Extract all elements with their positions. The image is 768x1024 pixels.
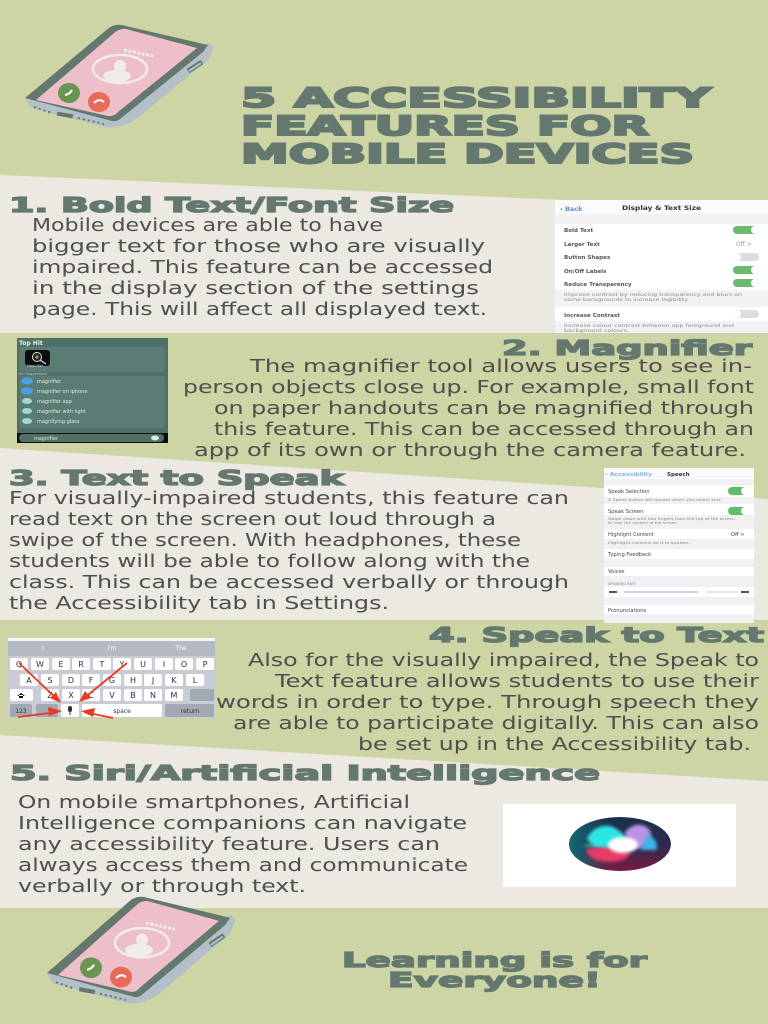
heading: speak to text: 4. Speak to Text: [429, 623, 765, 647]
heading: bold text: 1. Bold Text/Font Size: [9, 193, 454, 217]
screenshot: speech settings: Speak Screen: [608, 509, 643, 515]
screenshot: keyboard with arrows: A: [26, 676, 32, 685]
icon: phone bottom: [47, 897, 236, 1003]
text block: siri: [18, 793, 468, 897]
screenshot: keyboard with arrows: C: [88, 691, 94, 700]
text block: bold text: bigger text for those who are visually: [32, 237, 485, 257]
screenshot: keyboard with arrows: P: [203, 660, 208, 669]
screenshot: keyboard with arrows: E: [58, 660, 64, 669]
screenshot: keyboard with arrows: L: [193, 676, 198, 685]
screenshot: keyboard with arrows: Q: [16, 660, 22, 669]
text block: text to speak: swipe of the screen. With headphones, these: [9, 531, 521, 551]
screenshot: speech settings: Typing Feedback: [607, 552, 651, 558]
screenshot: display and text size settings: ‹ Back: [560, 205, 583, 213]
screenshot: display and text size settings: Increase Contrast: [564, 313, 620, 319]
screenshot: keyboard with arrows: D: [68, 676, 74, 685]
title: MOBILE DEVICES: [241, 139, 694, 170]
text block: magnifier: this feature. This can be accessed through an: [214, 420, 754, 440]
screenshot: keyboard with arrows: X: [68, 691, 74, 700]
closing message: [342, 948, 647, 992]
screenshot: keyboard with arrows: J: [151, 676, 154, 685]
text block: speak to text: are able to participate digitally. This can also: [233, 714, 759, 734]
text block: bold text: in the display section of the settings: [32, 279, 479, 299]
panel: siri background: [0, 735, 768, 908]
screenshot: magnifier search: magnifying glass: [37, 419, 80, 425]
screenshot: speech settings: A Speak button will appear when you select text.: [608, 498, 722, 502]
screenshot: speech settings: Speech: [667, 472, 690, 478]
screenshot: keyboard with arrows: H: [130, 676, 136, 685]
text block: magnifier: The magnifier tool allows users to see in-: [249, 357, 752, 377]
screenshot: display and text size settings: background colours.: [564, 328, 629, 333]
panel: text to speak background: [0, 448, 768, 620]
text block: magnifier: on paper handouts can be magnified through: [214, 399, 754, 419]
screenshot: speech settings: Highlight Content: [608, 532, 654, 538]
text block: siri: any accessibility feature. Users can: [18, 835, 440, 855]
icon: phone top: [25, 25, 214, 127]
screenshot: magnifier search: magnifier on iphone: [37, 389, 87, 395]
screenshot: keyboard with arrows: O: [181, 660, 187, 669]
text block: text to speak: read text on the screen out loud through a: [9, 510, 496, 530]
screenshot: keyboard with arrows: I'm: [107, 645, 117, 652]
title: 5 ACCESSIBILITY: [241, 83, 712, 114]
text block: bold text: impaired. This feature can be accessed: [32, 258, 493, 278]
screenshot: keyboard with arrows: V: [109, 691, 115, 700]
screenshot: display and text size settings: Bold Text: [564, 228, 593, 234]
text block: speak to text: be set up in the Accessibility tab.: [358, 735, 751, 755]
screenshot: display and text size settings: Off >: [736, 241, 752, 248]
screenshot: speech settings: Swipe down with two fingers from the top of the screen: [608, 517, 735, 521]
screenshot: display and text size settings: [555, 200, 768, 333]
screenshot: keyboard with arrows: R: [78, 660, 84, 669]
screenshot: keyboard with arrows: space: [113, 708, 131, 715]
screenshot: keyboard with arrows: [8, 638, 215, 718]
text block: siri: verbally or through text.: [18, 877, 306, 897]
screenshot: magnifier search: Top Hit: [19, 340, 43, 347]
screenshot: keyboard with arrows: W: [36, 660, 44, 669]
screenshot: magnifier search: Siri Suggestions: [19, 372, 47, 376]
text block: speak to text: words in order to type. Through speech they: [216, 693, 759, 713]
screenshot: display and text size settings: Increase colour contrast between app foreground and: [564, 323, 735, 328]
screenshot: display and text size settings: some backgrounds to increase legibility.: [564, 297, 689, 302]
screenshot: magnifier search: magnifier app: [37, 399, 72, 405]
screenshot: speech settings: SPEAKING RATE: [608, 582, 637, 586]
text block: siri: always access them and communicate: [18, 856, 468, 876]
text block: magnifier: [183, 357, 754, 461]
screenshot: display and text size settings: Button Shapes: [564, 255, 611, 261]
screenshot: speech settings: to hear the content of the screen.: [608, 521, 678, 525]
screenshot: keyboard with arrows: return: [181, 708, 199, 715]
screenshot: magnifier search: Magnifier: [27, 364, 44, 368]
arrows: pointing to microphone key: [18, 663, 127, 718]
text block: bold text: [32, 216, 493, 320]
screenshot: magnifier search: magnifier with light: [37, 409, 86, 415]
screenshot: keyboard with arrows: B: [130, 691, 136, 700]
screenshot: speech settings: Off >: [731, 532, 745, 538]
text block: siri: On mobile smartphones, Artificial: [18, 793, 410, 813]
panel: bold text background: [0, 175, 768, 333]
screenshot: keyboard with arrows: Z: [47, 691, 53, 700]
icon: siri orb: [503, 804, 736, 887]
text block: text to speak: students will be able to follow along with the: [9, 552, 530, 572]
text block: text to speak: the Accessibility tab in Settings.: [9, 594, 389, 614]
screenshot: speech settings: Voices: [608, 569, 625, 575]
text block: siri: Intelligence companions can navigate: [18, 814, 467, 834]
screenshot: magnifier search: [17, 338, 168, 443]
screenshot: keyboard with arrows: K: [171, 676, 177, 685]
screenshot: keyboard with arrows: U: [140, 660, 146, 669]
screenshot: keyboard with arrows: Y: [119, 660, 125, 669]
screenshot: speech settings: Highlight content as it is spoken.: [608, 541, 690, 545]
screenshot: keyboard with arrows: N: [150, 691, 156, 700]
screenshot: keyboard with arrows: F: [89, 676, 94, 685]
text block: speak to text: [216, 651, 760, 755]
text block: magnifier: app of its own or through the camera feature.: [194, 441, 746, 461]
screenshot: keyboard with arrows: M: [171, 691, 178, 700]
screenshot: keyboard with arrows: The: [174, 645, 187, 652]
text block: speak to text: Also for the visually impaired, the Speak to: [248, 651, 759, 671]
screenshot: display and text size settings: Reduce Transparency: [564, 282, 632, 288]
title: FEATURES FOR: [241, 111, 649, 142]
screenshot: keyboard with arrows: G: [109, 676, 115, 685]
text block: magnifier: person objects close up. For example, small font: [183, 378, 754, 398]
screenshot: magnifier search: magnifier: [34, 436, 59, 442]
heading: siri: 5. Siri/Artificial Intelligence: [10, 761, 600, 785]
screenshot: speech settings: [604, 468, 754, 623]
text block: speak to text: Text feature allows students to use their: [274, 672, 760, 692]
screenshot: display and text size settings: Improve contrast by reducing transparency and blurs on: [564, 292, 743, 297]
closing message: Everyone!: [388, 968, 601, 992]
screenshot: keyboard with arrows: T: [99, 660, 105, 669]
text block: bold text: Mobile devices are able to have: [32, 216, 383, 236]
screenshot: speech settings: Speak Selection: [608, 489, 650, 495]
screenshot: keyboard with arrows: S: [47, 676, 53, 685]
heading: magnifier: 2. Magnifier: [502, 336, 752, 360]
screenshot: display and text size settings: Display & Text Size: [622, 205, 701, 212]
text block: text to speak: class. This can be accessed verbally or through: [9, 573, 569, 593]
closing message: Learning is for: [342, 948, 647, 972]
screenshot: keyboard with arrows: 123: [15, 708, 27, 715]
text block: text to speak: For visually-impaired students, this feature can: [9, 489, 569, 509]
screenshot: speech settings: Pronunciations: [608, 608, 647, 614]
screenshot: keyboard with arrows: I: [42, 645, 44, 652]
text block: text to speak: [9, 489, 569, 614]
screenshot: display and text size settings: On/Off Labels: [564, 269, 607, 275]
screenshot: magnifier search: magnifier: [37, 379, 62, 385]
screenshot: keyboard with arrows: I: [163, 660, 165, 669]
title: [241, 83, 712, 170]
text block: bold text: page. This will affect all displayed text.: [32, 300, 487, 320]
screenshot: display and text size settings: Larger Text: [564, 242, 600, 248]
screenshot: speech settings: ‹ Accessibility: [605, 472, 653, 478]
heading: text to speak: 3. Text to Speak: [9, 466, 345, 490]
